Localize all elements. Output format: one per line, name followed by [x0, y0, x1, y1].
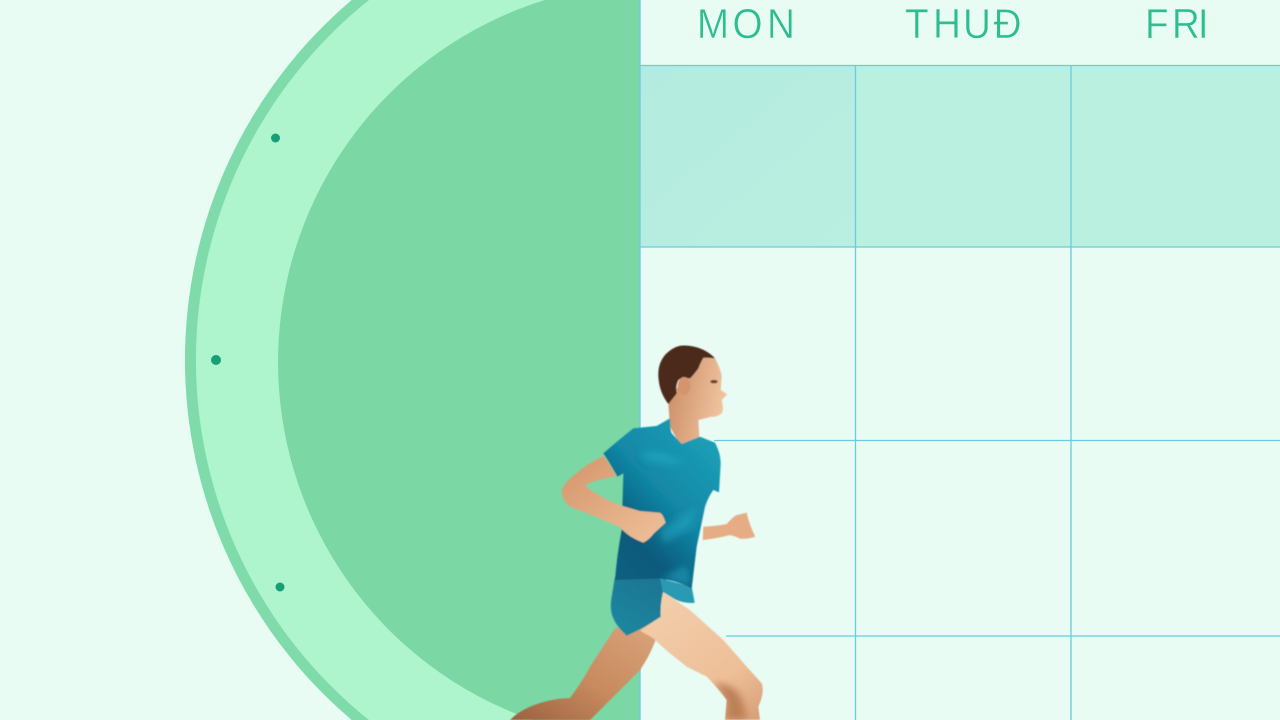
- front leg: [637, 590, 767, 720]
- weekday labels: FRI: [1145, 0, 1209, 47]
- neck and face: [668, 357, 727, 445]
- shorts: [611, 577, 667, 636]
- weekday labels: THUĐ: [905, 0, 1022, 47]
- near arm: [562, 456, 666, 543]
- eye: [710, 380, 718, 383]
- weekday labels: MON: [697, 0, 795, 47]
- highlighted calendar row: [640, 66, 1280, 247]
- semicircle graphic: [185, 0, 640, 720]
- shirt: [600, 417, 723, 590]
- hair: [658, 345, 715, 404]
- knee shade: [713, 683, 747, 720]
- inner dark semicircle: [278, 0, 640, 720]
- light band: [196, 0, 640, 720]
- shirt highlights: [640, 451, 697, 587]
- runner: [510, 345, 767, 720]
- marker dots: [211, 134, 284, 592]
- weekday labels: [697, 0, 1209, 47]
- back leg: [510, 620, 660, 720]
- calendar: [640, 0, 1280, 720]
- calendar grid lines: [640, 0, 1280, 720]
- shorts flap: [660, 578, 695, 603]
- ear: [678, 377, 690, 395]
- outer ring: [185, 0, 640, 720]
- far arm: [703, 513, 755, 540]
